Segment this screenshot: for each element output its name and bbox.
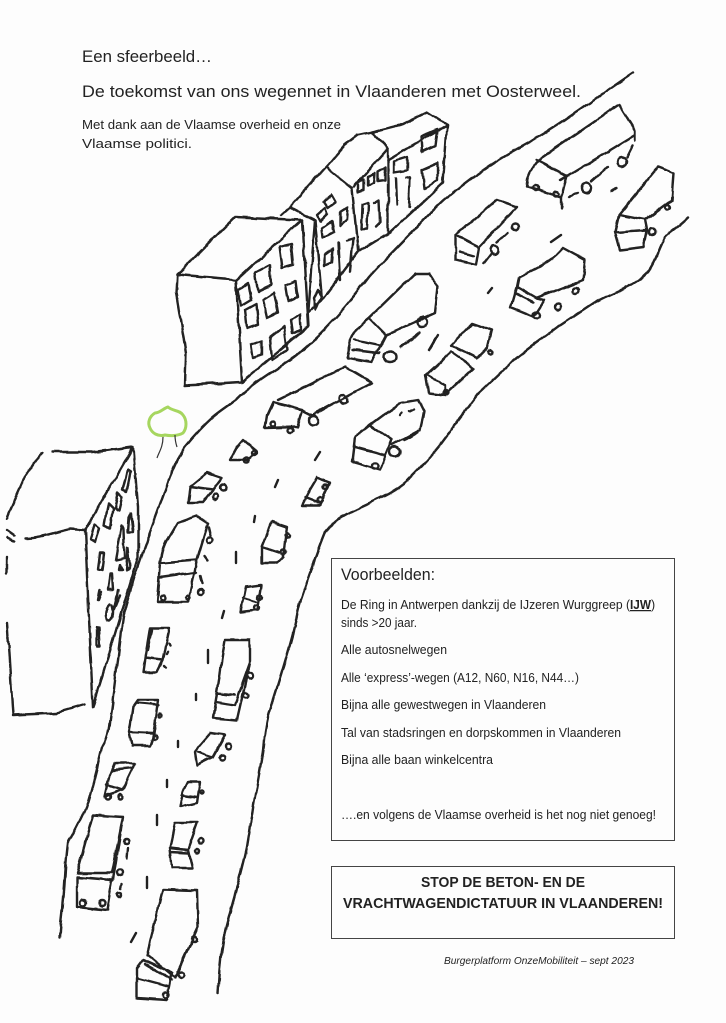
left block windows [90, 470, 133, 647]
buildings: terraced row [281, 112, 447, 313]
panel heading: Voorbeelden: [341, 565, 435, 584]
icon: green tree [149, 407, 186, 458]
drawing: road edges [60, 73, 688, 993]
row windows [314, 130, 438, 310]
title [82, 47, 581, 101]
lorry 8 [262, 522, 289, 563]
examples list: Alle autosnelwegen [341, 643, 447, 657]
car 2 [188, 473, 226, 502]
lorry 2 [615, 167, 674, 250]
subtitle: acknowledgement: Met dank aan de Vlaamse overheid en onze [82, 117, 341, 132]
lorry 7 [265, 367, 372, 434]
examples list: IJW [630, 598, 651, 612]
big lorry bottom left [77, 815, 128, 910]
lorry 13 [170, 822, 204, 868]
building: left block [7, 447, 138, 715]
panel: call to action [332, 866, 674, 938]
lorry 1 [527, 105, 635, 208]
tanker [352, 400, 424, 470]
lorry 5 [347, 273, 438, 362]
car 3 [195, 733, 231, 765]
examples list: sinds >20 jaar. [341, 616, 417, 630]
examples list: ….en volgens de Vlaamse overheid is het nog niet genoeg! [341, 808, 656, 822]
examples list: Bijna alle baan winkelcentra [341, 753, 493, 767]
building: large corner block [176, 217, 308, 385]
lane markings [131, 235, 561, 942]
examples list: Alle ‘express’-wegen (A12, N60, N16, N44…) [341, 671, 579, 685]
lorry 6 [426, 323, 492, 396]
examples list: ) [651, 598, 655, 612]
lorry 10 [143, 628, 170, 672]
small lorry right [302, 478, 330, 505]
title: Een sfeerbeeld… [82, 47, 212, 66]
panel: call to action: VRACHTWAGENDICTATUUR IN VLAANDEREN! [343, 895, 663, 912]
lorry 12 [105, 763, 135, 800]
examples list: Bijna alle gewestwegen in Vlaanderen [341, 698, 546, 712]
big lorry left [157, 516, 213, 602]
building windows [238, 244, 301, 360]
car 1 [230, 440, 258, 462]
lorry 4 [511, 248, 585, 318]
title: De toekomst van ons wegennet in Vlaanderen met Oosterweel. [82, 82, 581, 101]
small car 4 [180, 782, 204, 807]
subtitle: acknowledgement: Vlaamse politici. [82, 136, 192, 151]
subtitle: acknowledgement [82, 117, 341, 151]
traffic: lorries and cars [77, 105, 674, 1000]
small lorry 9 [240, 585, 262, 612]
examples list [341, 598, 656, 822]
panel: call to action: STOP DE BETON- EN DE [421, 874, 585, 891]
examples list: Tal van stadsringen en dorpskommen in Vlaanderen [341, 726, 621, 740]
panel: voorbeelden [332, 558, 674, 840]
lorry 11 [129, 700, 162, 746]
lorry 3 [456, 200, 518, 265]
examples list: De Ring in Antwerpen dankzij de IJzeren Wurggreep ( [341, 598, 631, 612]
long lorry [213, 640, 253, 720]
footer credit: Burgerplatform OnzeMobiliteit – sept 2023 [444, 955, 634, 967]
big lorry bottom [137, 889, 198, 1000]
